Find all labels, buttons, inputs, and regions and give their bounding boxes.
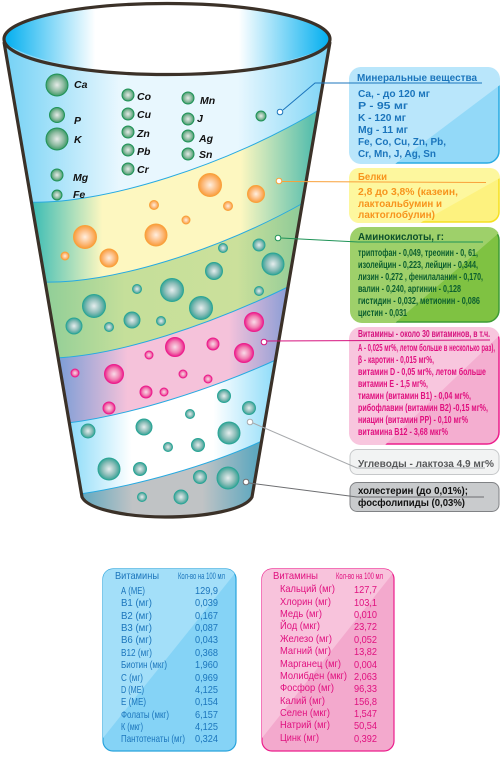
text: vitamin amounts: витамин E - 1,5 мг%, (358, 378, 428, 390)
mineral labels: Cu (137, 109, 152, 121)
table rows: Магний (мг) (280, 645, 331, 657)
table rows: В2 (мг) (121, 610, 152, 622)
table rows: 4,125 (195, 684, 218, 696)
table rows: 6,157 (195, 709, 218, 721)
table heading (115, 570, 225, 582)
mineral labels: Cr (137, 164, 150, 176)
mineral labels: J (197, 113, 204, 125)
heading: proteins: Белки (358, 171, 387, 183)
table rows: В6 (мг) (121, 634, 152, 646)
mineral labels: Ca (74, 79, 88, 91)
amino acid bubbles (66, 239, 284, 334)
table rows: D (МЕ) (121, 684, 144, 696)
table rows: Цинк (мг) (280, 732, 319, 744)
text: lactose: Углеводы - лактоза 4,9 мг% (358, 458, 495, 470)
glass outline (4, 4, 330, 517)
table rows: 13,82 (354, 646, 377, 658)
table rows: 96,33 (354, 683, 377, 695)
text: mineral amounts: Fe, Co, Cu, Zn, Pb, (358, 136, 446, 148)
table rows: Селен (мкг) (280, 707, 330, 719)
table rows (121, 585, 218, 745)
table rows: 0,052 (354, 634, 377, 646)
mineral labels: Co (137, 91, 152, 103)
table rows: 0,324 (195, 733, 218, 745)
mineral labels: Ag (198, 133, 214, 145)
text: mineral amounts: Cr, Mn, J, Ag, Sn (358, 148, 436, 160)
table heading: Витамины (273, 570, 318, 582)
leader: proteins (276, 178, 486, 184)
table rows: Йод (мкг) (280, 619, 320, 632)
panel: cholesterol and phospholipids (350, 482, 499, 512)
table rows: Калий (мг) (280, 695, 325, 707)
glass of milk with layers (0, 4, 340, 530)
table rows: 0,154 (195, 696, 218, 708)
mineral labels: Mn (200, 95, 215, 107)
panel: minerals (349, 67, 500, 164)
panel: proteins (349, 168, 500, 223)
table rows: 1,547 (354, 708, 377, 720)
text: mineral amounts: Ca, - до 120 мг (358, 88, 431, 100)
table rows (280, 583, 377, 745)
table rows: Железо (мг) (280, 633, 332, 645)
table rows: Медь (мг) (280, 608, 322, 620)
table heading (273, 570, 383, 582)
mineral bubbles (46, 74, 266, 200)
text: vitamin amounts: β - каротин - 0,015 мг%, (358, 354, 434, 366)
table rows: 0,392 (354, 733, 377, 745)
text: vitamin amounts (358, 342, 495, 438)
layer boundaries (25, 108, 322, 494)
text: protein amounts: лактоальбумин и (358, 198, 442, 210)
table rows: Биотин (мкг) (121, 659, 167, 671)
carbohydrate bubbles (81, 390, 256, 480)
heading: minerals: Минеральные вещества (357, 72, 477, 84)
text: protein amounts: лактоглобулин) (358, 209, 435, 221)
layer: vitamins (60, 288, 286, 422)
cholesterol bubbles (138, 467, 239, 504)
text: cholesterol: холестерин (до 0,01%); (358, 485, 468, 497)
table rows: 103,1 (354, 597, 377, 609)
table rows: 4,125 (195, 721, 218, 733)
table rows: 0,010 (354, 609, 377, 621)
mineral labels: P (74, 115, 82, 127)
text: mineral amounts: P - 95 мг (358, 100, 409, 112)
mineral labels: Sn (199, 149, 212, 161)
layer: carbohydrates (71, 362, 274, 493)
table: vitamins (103, 569, 236, 751)
table rows: 0,368 (195, 647, 218, 659)
leader: vitamins (261, 339, 490, 345)
mineral labels: Fe (73, 189, 85, 201)
glass rim interior (4, 4, 330, 74)
text: mineral amounts (358, 88, 446, 160)
mineral labels: Zn (136, 128, 150, 140)
mineral labels: K (74, 134, 83, 146)
layer: amino acids (46, 205, 300, 358)
table rows: Фосфор (мг) (280, 682, 334, 694)
panel: amino acids (350, 227, 500, 323)
text: protein amounts: 2,8 до 3,8% (казеин, (358, 186, 458, 198)
text: protein amounts (358, 186, 458, 221)
vitamin bubbles (71, 312, 264, 414)
panel: carbohydrates (350, 450, 499, 474)
layer: minerals (0, 40, 340, 202)
text: cholesterol: фосфолипиды (0,03%) (358, 497, 465, 509)
table rows: В3 (мг) (121, 622, 152, 634)
table rows: 0,969 (195, 672, 218, 684)
table rows: 23,72 (354, 621, 377, 633)
table rows: В12 (мг) (121, 647, 152, 659)
table rows: 129,9 (195, 585, 218, 597)
table heading: Витамины (115, 570, 159, 582)
table rows: 0,039 (195, 597, 218, 609)
table rows: 0,167 (195, 610, 218, 622)
table rows: 0,087 (195, 622, 218, 634)
text: cholesterol (358, 485, 468, 509)
leader: amino acids (275, 235, 483, 242)
text: amino acid amounts (358, 247, 483, 319)
leader: carbohydrates (247, 419, 485, 468)
panel: vitamins (349, 327, 500, 445)
mineral labels: Mg (73, 172, 89, 184)
layer: cholesterol (83, 442, 260, 516)
table rows: Молибден (мкг) (280, 670, 347, 682)
table rows: Хлорин (мг) (280, 596, 331, 608)
table rows: Е (МЕ) (121, 696, 146, 708)
table rows: 0,004 (354, 659, 377, 671)
table rows: С (мг) (121, 672, 143, 684)
text: vitamin amounts: витамина В12 - 3,68 мкг% (358, 426, 448, 438)
table rows: Кальций (мг) (280, 583, 335, 595)
table rows: 156,8 (354, 696, 377, 708)
table rows: В1 (мг) (121, 597, 152, 609)
table rows: 0,043 (195, 634, 218, 646)
leader: cholesterol (243, 479, 484, 497)
table rows: 2,063 (354, 671, 377, 683)
mineral labels (73, 79, 215, 201)
table rows: Пантотенаты (мг) (121, 733, 185, 745)
table rows: 1,960 (195, 659, 218, 671)
layers (0, 40, 340, 530)
table rows: Натрий (мг) (280, 719, 330, 731)
table rows: К (мкг) (121, 721, 143, 733)
table: minerals (262, 569, 394, 751)
table rows: 127,7 (354, 584, 377, 596)
table rows: 50,54 (354, 720, 377, 732)
table rows: Фолаты (мкг) (121, 709, 169, 721)
text: mineral amounts: Mg - 11 мг (358, 124, 409, 136)
table heading: Кол-во на 100 мл (336, 571, 383, 582)
table rows: А (МЕ) (121, 585, 145, 597)
text: mineral amounts: K - 120 мг (358, 112, 407, 124)
text: amino acid amounts: цистин - 0,031 (358, 307, 407, 319)
protein bubbles (61, 174, 264, 267)
table heading: Кол-во на 100 мл (178, 571, 225, 582)
heading: amino acids: Аминокислоты, г: (358, 231, 444, 243)
leader: minerals (277, 83, 482, 115)
table rows: Марганец (мг) (280, 658, 341, 670)
layer: proteins (33, 112, 316, 282)
mineral labels: Pb (137, 146, 151, 158)
